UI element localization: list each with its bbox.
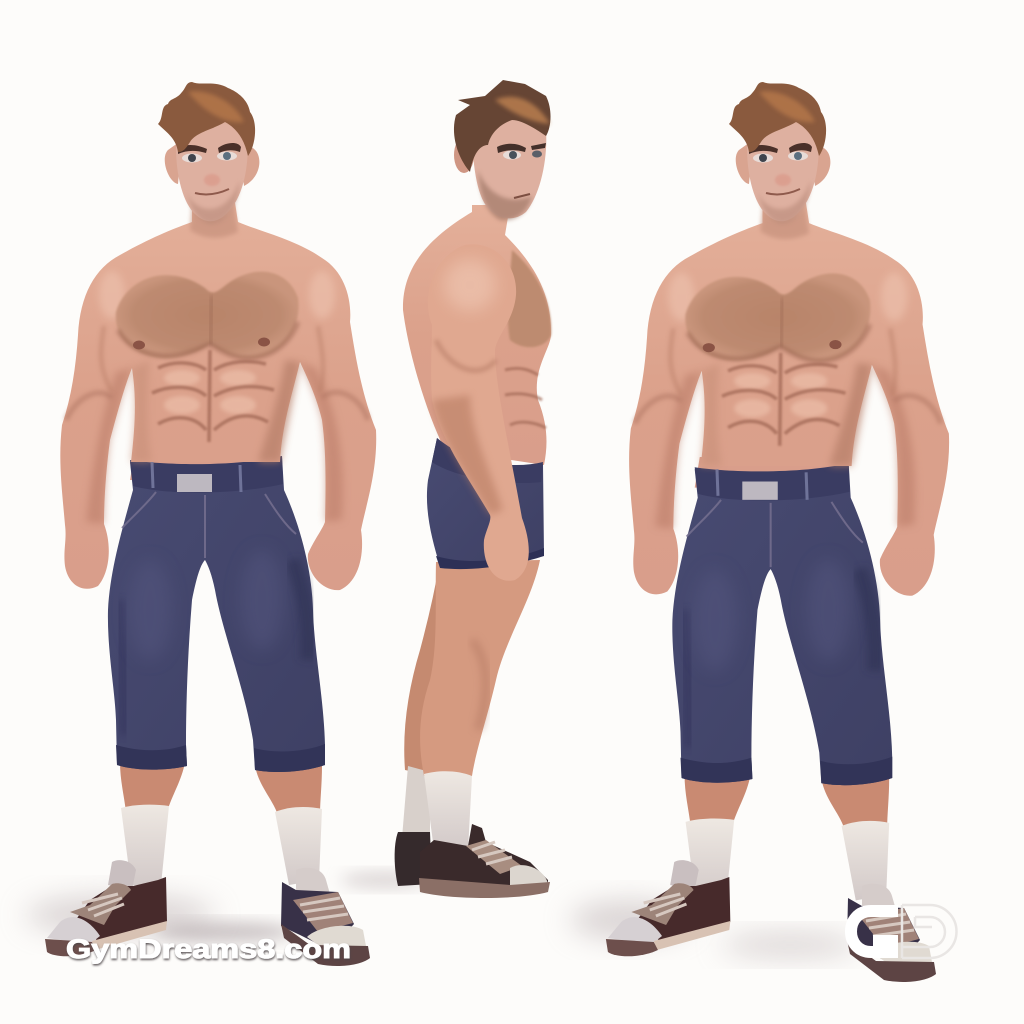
upper body: [60, 196, 376, 590]
right shoe: [281, 868, 370, 966]
left shoe: [606, 860, 730, 956]
logo: GD monogram: [851, 905, 957, 958]
figure: front view right: [606, 82, 949, 982]
watermark: site name: GymDreams8.com: [66, 934, 351, 964]
head: [158, 82, 259, 224]
hair: [454, 80, 551, 172]
upper body: [629, 197, 949, 596]
brows and eye: [497, 143, 546, 153]
head: [729, 82, 830, 224]
figure: side view centre: [395, 80, 551, 898]
shorts: [427, 438, 544, 567]
arm: [428, 244, 529, 581]
front shoe: [420, 824, 548, 892]
right shoe: [847, 884, 936, 982]
left shoe: [45, 860, 167, 956]
torso: [403, 205, 551, 465]
stubble: [478, 170, 532, 220]
figure: front view left: [45, 82, 376, 966]
ground shadows: [25, 872, 860, 957]
lower body: pants, socks, legs: [108, 450, 325, 885]
rear leg and sock: [404, 560, 520, 775]
chest hair: [508, 250, 551, 347]
front leg: [420, 560, 540, 776]
lower body: [672, 457, 892, 900]
side abs: [505, 368, 546, 428]
head: [472, 117, 546, 218]
sock: [424, 771, 472, 850]
